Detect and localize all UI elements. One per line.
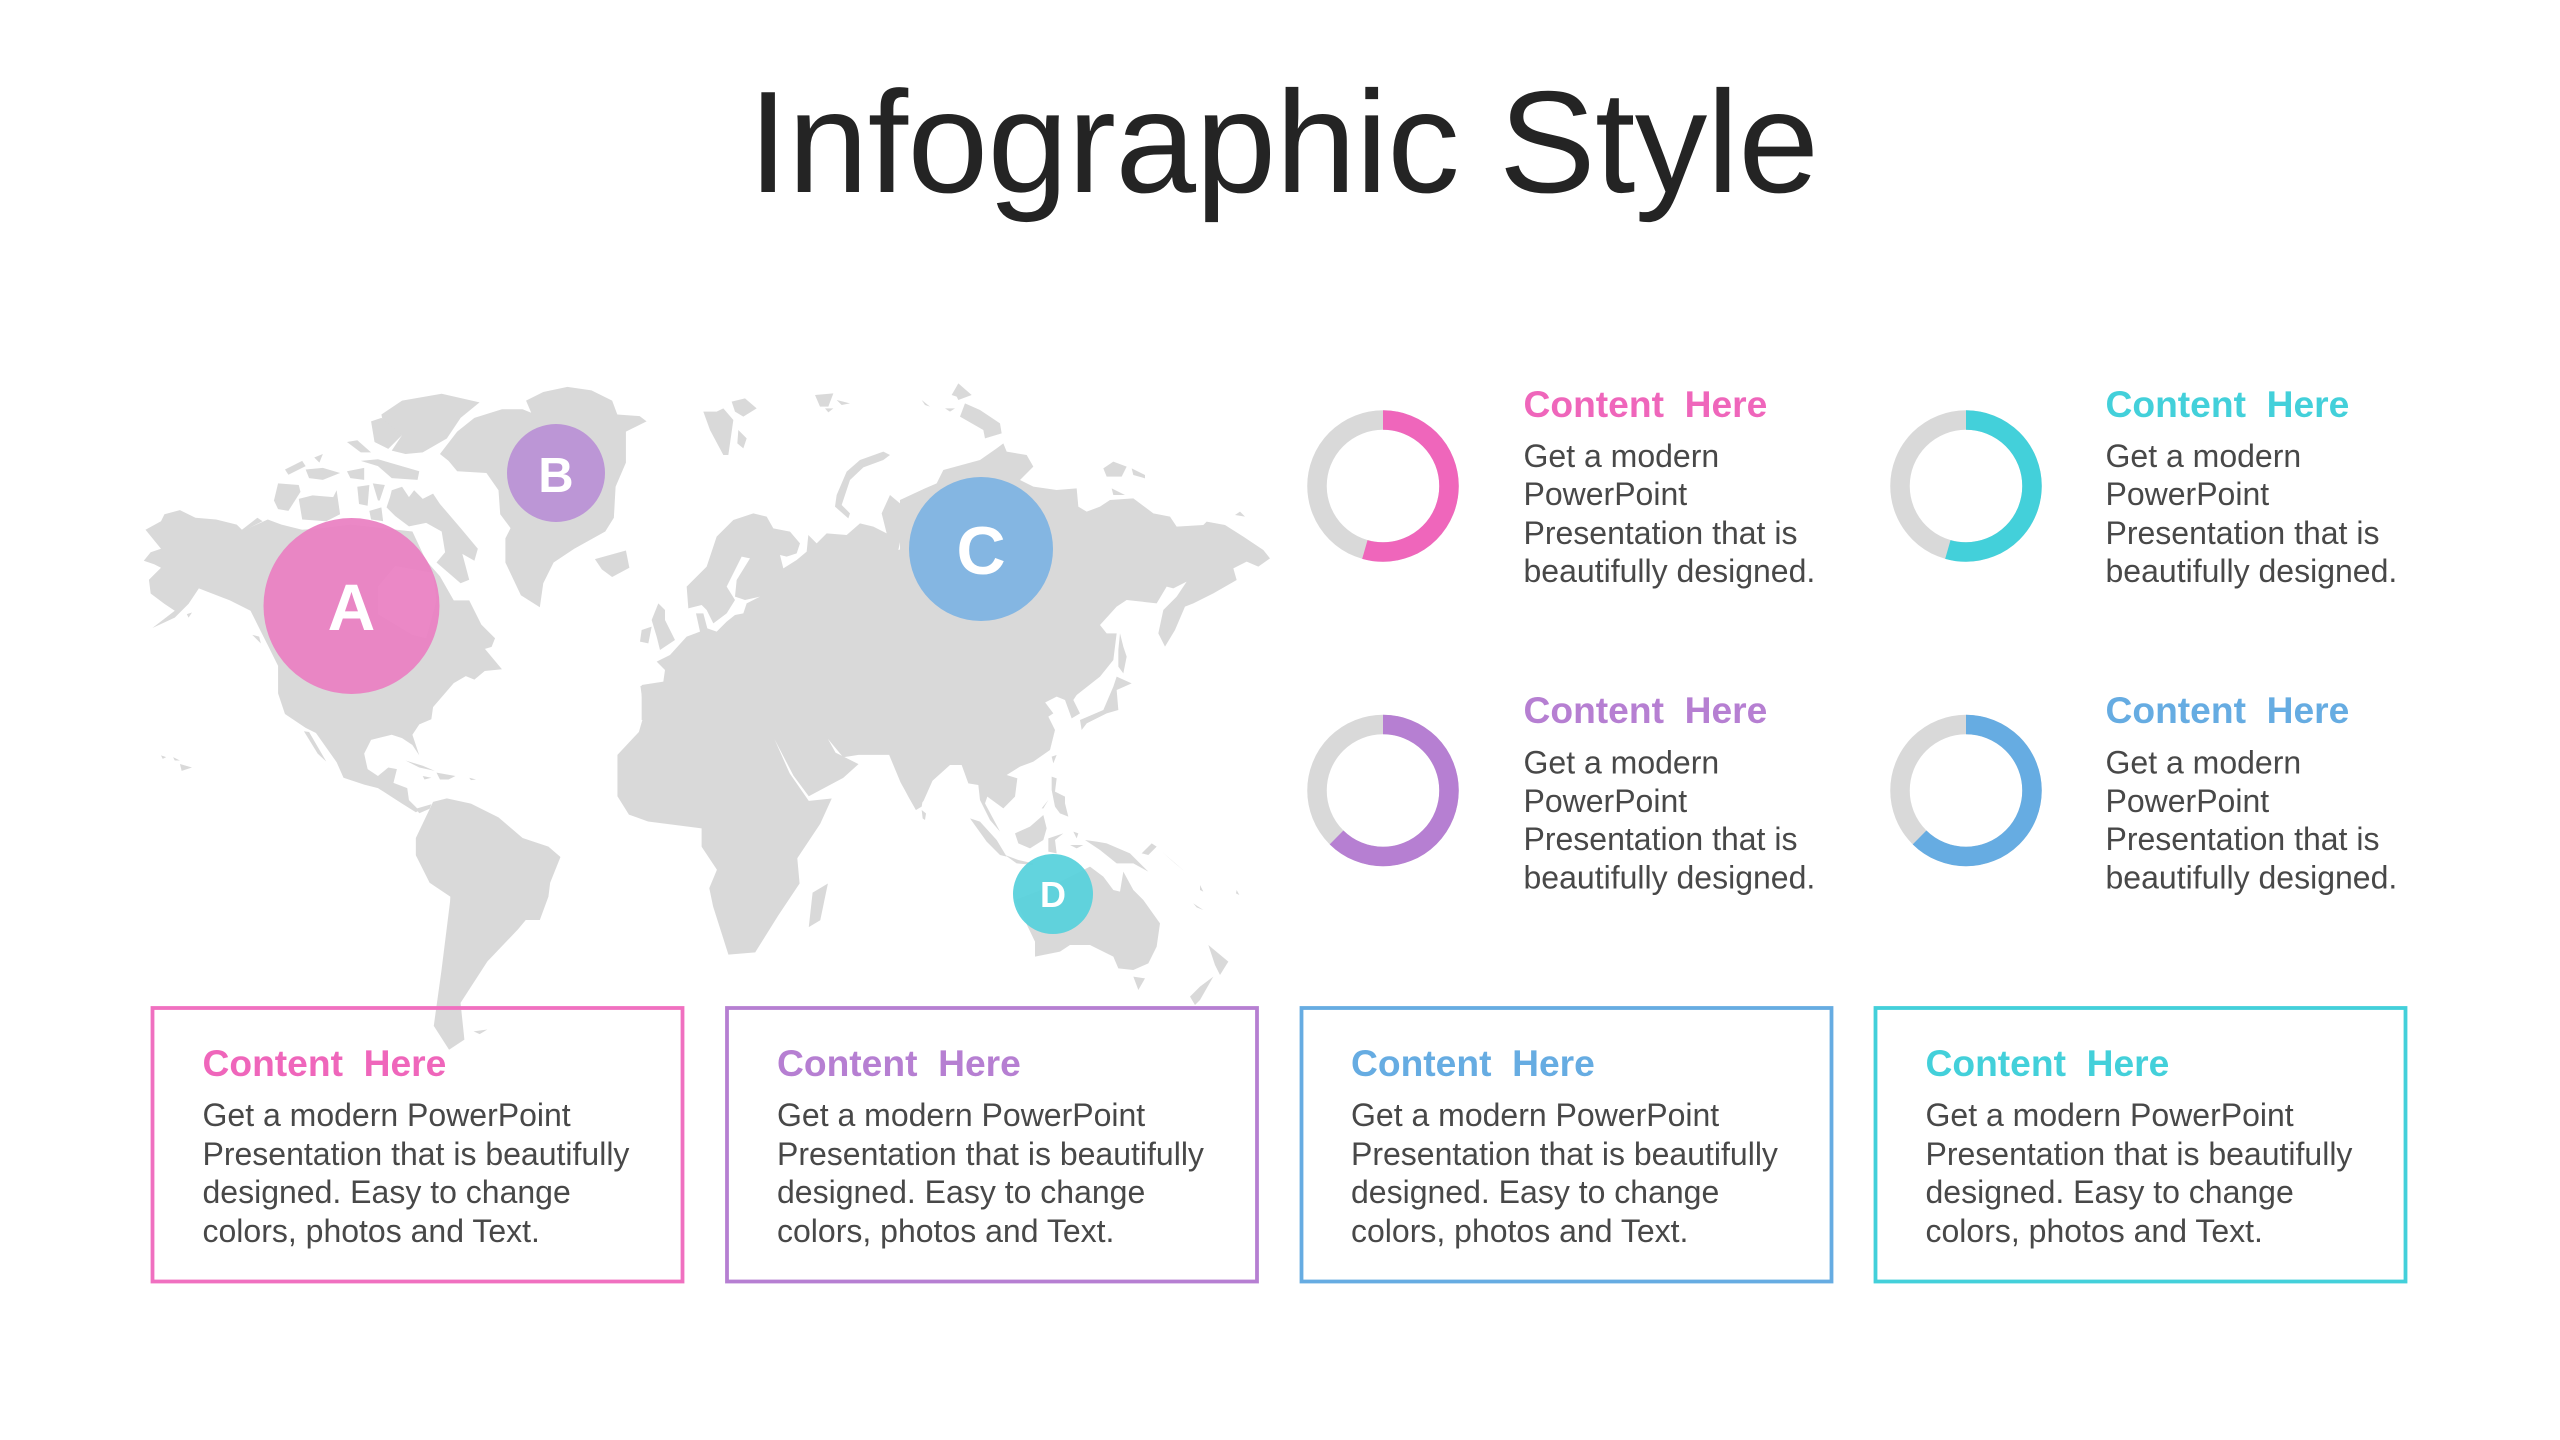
- donut item: blue: Get a modern: [2106, 744, 2301, 780]
- donut item: cyan: Presentation that is: [2106, 515, 2379, 551]
- donut item: cyan: Get a modern: [2106, 438, 2301, 474]
- panel: blue box: colors, photos and Text.: [1351, 1213, 1688, 1249]
- donut item: pink: [1317, 383, 1815, 589]
- donut item: cyan: PowerPoint: [2106, 476, 2269, 512]
- donut item: purple: [1317, 689, 1815, 896]
- panel: purple box: Presentation that is beautifully: [777, 1136, 1204, 1172]
- panel: pink box: Content Here: [202, 1042, 446, 1084]
- donut item: pink: Get a modern: [1524, 438, 1719, 474]
- donut item: pink: Presentation that is: [1524, 515, 1797, 551]
- donut item: purple: Presentation that is: [1524, 821, 1797, 857]
- donut item: blue: Content Here: [2106, 689, 2349, 731]
- marker D: D: [1040, 874, 1066, 915]
- donut item: cyan: Content Here: [2106, 383, 2349, 425]
- panel: pink box: Get a modern PowerPoint: [202, 1097, 571, 1133]
- panel: cyan box: colors, photos and Text.: [1926, 1213, 2263, 1249]
- donut item: purple: PowerPoint: [1524, 783, 1687, 819]
- donut item: pink: Content Here: [1524, 383, 1767, 425]
- panel: blue box: [1302, 1008, 1832, 1282]
- panel: purple box: designed. Easy to change: [777, 1174, 1145, 1210]
- panel: purple box: colors, photos and Text.: [777, 1213, 1114, 1249]
- panel: pink box: colors, photos and Text.: [202, 1213, 540, 1249]
- donut item: cyan: beautifully designed.: [2106, 553, 2397, 589]
- panel: blue box: designed. Easy to change: [1351, 1174, 1719, 1210]
- panel: purple box: Get a modern PowerPoint: [777, 1097, 1145, 1133]
- marker C: C: [956, 513, 1006, 589]
- marker D: [1013, 854, 1093, 934]
- donut item: blue: beautifully designed.: [2106, 860, 2397, 896]
- panel: cyan box: [1876, 1008, 2406, 1282]
- panel: cyan box: Get a modern PowerPoint: [1926, 1097, 2294, 1133]
- marker B: B: [538, 449, 574, 503]
- donut item: pink: PowerPoint: [1524, 476, 1687, 512]
- panel: cyan box: Content Here: [1926, 1042, 2169, 1084]
- donut item: pink: beautifully designed.: [1524, 553, 1815, 589]
- panel: blue box: Presentation that is beautifully: [1351, 1136, 1778, 1172]
- panel: pink box: Presentation that is beautifully: [202, 1136, 629, 1172]
- panel: pink box: designed. Easy to change: [202, 1174, 571, 1210]
- marker A: [264, 518, 440, 694]
- marker B: [507, 424, 605, 522]
- donut item: purple: beautifully designed.: [1524, 860, 1815, 896]
- donut item: blue: [1900, 689, 2397, 896]
- title: Infographic Style: [748, 61, 1819, 223]
- panel: cyan box: Presentation that is beautifully: [1926, 1136, 2352, 1172]
- donut item: blue: Presentation that is: [2106, 821, 2379, 857]
- marker C: [909, 477, 1053, 621]
- panel: blue box: Content Here: [1351, 1042, 1595, 1084]
- panel: pink box: [152, 1008, 682, 1282]
- donut item: blue: PowerPoint: [2106, 783, 2269, 819]
- world map: [144, 383, 1270, 1050]
- donut item: purple: Content Here: [1524, 689, 1767, 731]
- panel: purple box: [727, 1008, 1257, 1282]
- panel: cyan box: designed. Easy to change: [1926, 1174, 2294, 1210]
- donut item: purple: Get a modern: [1524, 744, 1719, 780]
- donut item: cyan: [1900, 383, 2397, 589]
- panel: blue box: Get a modern PowerPoint: [1351, 1097, 1719, 1133]
- marker A: A: [328, 570, 375, 644]
- panel: purple box: Content Here: [777, 1042, 1021, 1084]
